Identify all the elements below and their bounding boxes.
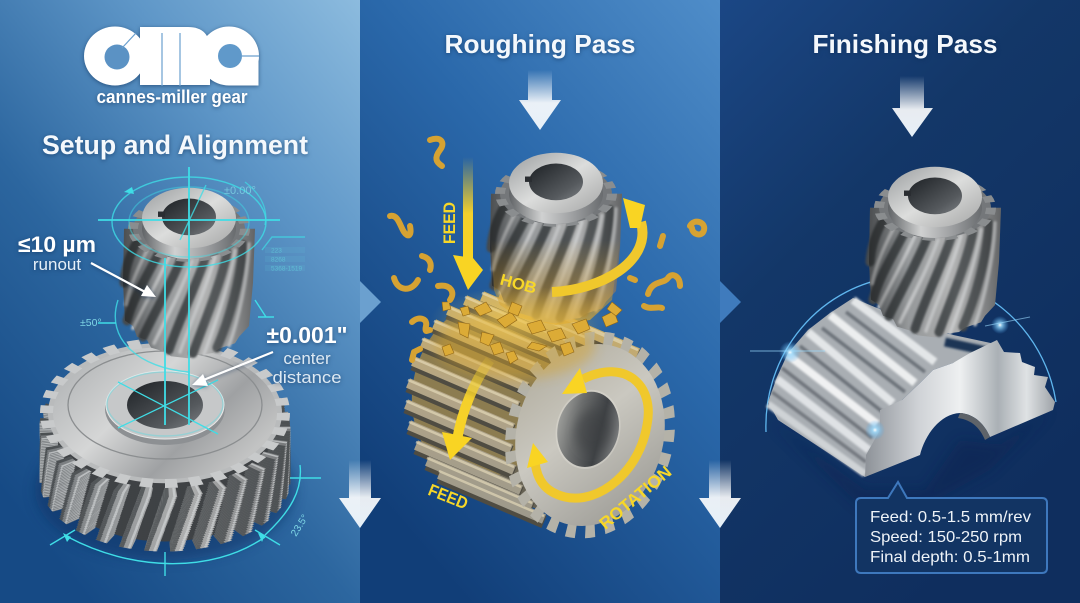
label: bottom dimension: 23.5° [289, 513, 311, 539]
arrow: workpiece feed [442, 360, 490, 460]
arrow: roughing down arrow [519, 70, 561, 130]
arrow: finishing down arrow [892, 76, 933, 137]
measurement overlay: cyan alignment guides [50, 167, 321, 576]
callout: finishing parameters: Speed: 150-250 rpm [870, 529, 1022, 546]
heading: finishing pass: Finishing Pass [812, 29, 998, 59]
callout: runout [18, 232, 156, 297]
callout: finishing parameters: Final depth: 0.5-1mm [870, 549, 1030, 566]
callout: center distance: distance [272, 368, 342, 387]
callout: finishing parameters [856, 482, 1047, 573]
gold tint on hob [491, 240, 620, 325]
illustration: roughing workpiece gear [393, 285, 689, 548]
workpiece front face [491, 322, 689, 548]
readout: digital values: 223 [271, 248, 282, 254]
arrow: chevron from setup to roughing [360, 281, 381, 323]
readout: digital values [265, 247, 305, 272]
label: feed lower: FEED [425, 480, 471, 513]
arrow: vertical feed [453, 157, 483, 290]
logo: cannes-miller gear: cannes-miller gear [96, 87, 248, 107]
illustration: roughing hob [490, 153, 622, 325]
readout: digital values: 8268 [271, 256, 286, 264]
callout: runout: runout [33, 255, 81, 274]
illustration: large helical gear with pinion [35, 188, 295, 560]
gear top face [48, 343, 282, 483]
helical gear body [48, 359, 282, 547]
callout: runout: ≤10 µm [18, 232, 96, 257]
arrow: roughing to finishing down arrow [699, 460, 741, 528]
reflection under section [770, 410, 1050, 520]
label: angle tolerance top: ±0.00° [224, 185, 256, 197]
label: feed vertical: FEED [440, 202, 459, 244]
label: angle tolerance left: ±50° [80, 317, 102, 329]
arrow: hob rotation [552, 198, 645, 292]
section front face [865, 340, 1055, 477]
callout: center distance: ±0.001" [266, 322, 348, 348]
ridges [768, 300, 1000, 474]
chips: flying gold curls [390, 139, 704, 360]
label: hob: HOB [498, 272, 538, 298]
logo: cannes-miller gear [84, 26, 259, 107]
callout: finishing parameters: Feed: 0.5-1.5 mm/rev [870, 509, 1031, 526]
panel: roughing pass background [360, 0, 720, 603]
gold tint on teeth [435, 311, 595, 379]
arrow: workpiece rotation [527, 368, 648, 498]
callout: center distance: center [283, 349, 331, 368]
label: rotation: ROTATION [596, 462, 675, 533]
sparkles [750, 316, 1030, 440]
workpiece teeth body [393, 285, 638, 522]
heading: setup and alignment: Setup and Alignment [42, 130, 308, 160]
panel: finishing pass background [720, 0, 1080, 603]
glow: cutting zone [430, 286, 610, 354]
arrow: chevron from roughing to finishing [720, 281, 741, 323]
heading: roughing pass: Roughing Pass [444, 29, 636, 59]
callout: center distance [192, 322, 348, 387]
pinion gear [869, 167, 1001, 337]
glow arc [766, 276, 1056, 432]
pinion gear [123, 188, 255, 358]
illustration: finished gear section with pinion [750, 167, 1056, 520]
readout: digital values: 5368-1519 [271, 266, 302, 272]
gear shadow [35, 420, 295, 560]
section teeth body [768, 298, 1000, 477]
panel: setup and alignment background [0, 0, 360, 603]
arrow: setup to roughing down arrow [339, 460, 381, 528]
chips: contact zone swarf [442, 302, 622, 364]
